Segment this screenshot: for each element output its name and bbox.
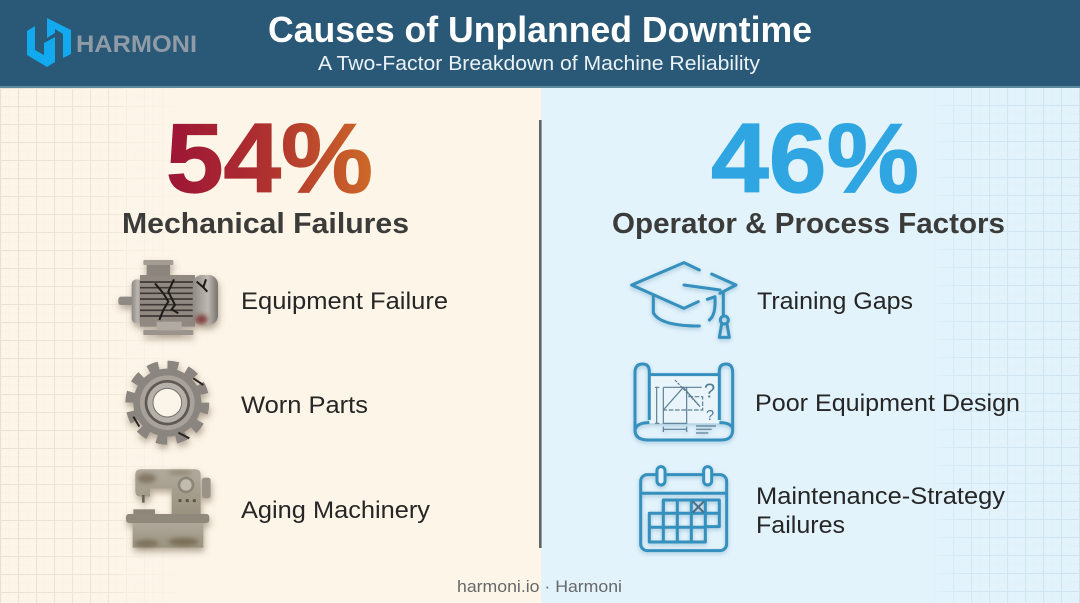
center divider bbox=[539, 120, 542, 548]
panel: left background bbox=[0, 88, 124, 603]
label: Equipment Failure: Equipment Failure bbox=[241, 288, 448, 315]
heading: Operator & Process Factors: Operator & Process Factors bbox=[612, 208, 1005, 240]
icon: graduation cap bbox=[632, 263, 736, 337]
logo: Harmoni bbox=[27, 18, 197, 67]
label: Maintenance-Strategy Failures: Failures bbox=[756, 512, 845, 539]
icon: cracked electric motor bbox=[118, 260, 218, 335]
label: Worn Parts: Worn Parts bbox=[241, 392, 368, 419]
label: Training Gaps: Training Gaps bbox=[757, 288, 913, 315]
label: Maintenance-Strategy Failures bbox=[756, 483, 1005, 539]
header band bbox=[0, 0, 1080, 88]
icon: maintenance calendar bbox=[641, 467, 727, 551]
subtitle: A Two-Factor Breakdown of Machine Reliability bbox=[318, 53, 760, 75]
icon: rusted sewing machine bbox=[126, 469, 211, 548]
statistic: 46%: 46% bbox=[711, 103, 919, 213]
icon: blueprint with question marks: ? bbox=[704, 381, 715, 403]
icon: worn gear bbox=[130, 365, 205, 440]
label: Poor Equipment Design: Poor Equipment Design bbox=[755, 390, 1020, 417]
statistic: 54%: 54% bbox=[166, 103, 373, 213]
title: Causes of Unplanned Downtime bbox=[268, 9, 812, 50]
icon: blueprint with question marks bbox=[635, 364, 733, 440]
logo wordmark: HARMONI bbox=[76, 31, 197, 58]
icon: blueprint with question marks: ? bbox=[706, 408, 714, 424]
label: Aging Machinery: Aging Machinery bbox=[241, 497, 430, 524]
footer source line: harmoni.io · Harmoni bbox=[457, 577, 622, 596]
icon: hexagon logo mark bbox=[27, 18, 71, 67]
heading: Mechanical Failures: Mechanical Failures bbox=[122, 208, 409, 240]
panel: right background bbox=[541, 88, 1080, 603]
label: Maintenance-Strategy Failures: Maintenance-Strategy bbox=[756, 483, 1005, 510]
